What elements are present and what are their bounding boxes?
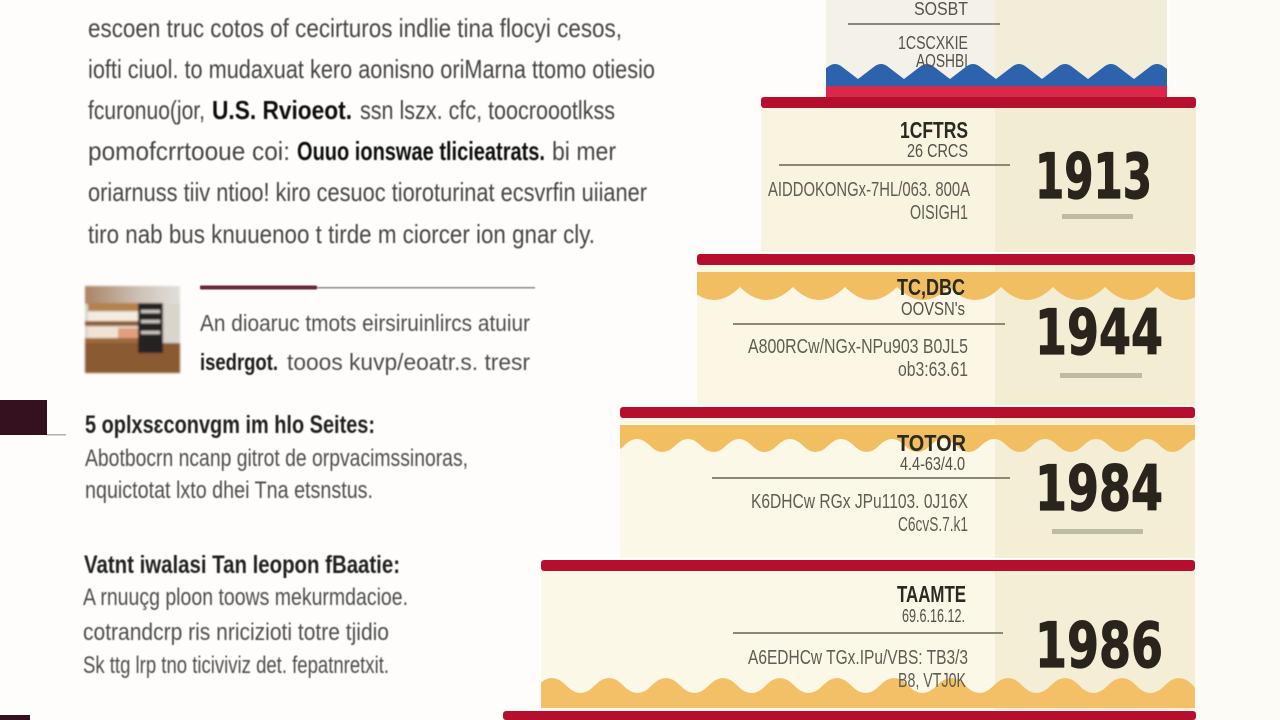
orange wave — [538, 678, 1210, 708]
tier 1913: 26 CRCS — [907, 141, 968, 161]
orange wave — [620, 425, 1195, 452]
side note: tooos kuvp/eoatr.s. tresr — [287, 349, 530, 375]
tier 1944: OOVSN's — [901, 299, 965, 319]
text block: first subsection: Abotbocrn ncanp gitrot de orpvacimssinoras, — [85, 445, 468, 472]
tier 1984 — [620, 407, 1195, 558]
intro paragraph: fcuronuo(jor, — [88, 95, 205, 125]
tier 1913: AIDDOKONGx-7HL/063. 800A — [768, 179, 970, 201]
tier 1944: TC,DBC — [897, 274, 965, 300]
tier 1944: ob3:63.61 — [898, 359, 968, 381]
tier 1984: C6cvS.7.k1 — [898, 514, 968, 536]
tier 1913: 1913 — [1035, 140, 1152, 213]
intro paragraph: oriarnuss tiiv ntioo! kiro cesuoc tioroturinat ecsvrfin uiianer — [88, 177, 647, 207]
text block: second subsection — [83, 551, 408, 679]
tier 1913: OISIGH1 — [910, 202, 968, 224]
tier 1913 — [761, 97, 1196, 252]
text block: first subsection: 5 oplxsɛconvgm im hlo Seites: — [85, 411, 375, 439]
tier 0: top layer, blue wave — [812, 0, 1190, 97]
intro paragraph: iofti ciuol. to mudaxuat kero aonisno oriMarna ttomo otiesio — [88, 54, 655, 84]
side note — [200, 286, 535, 375]
tier 0: top layer, blue wave: 1CSCXKIE — [898, 33, 968, 53]
intro paragraph: ssn lszx. cfc, toocroootlkss — [360, 95, 615, 125]
tier 1944: A800RCw/NGx-NPu903 B0JL5 — [748, 336, 968, 358]
intro paragraph: tiro nab bus knuuenoo t tirde m ciorcer ion gnar cly. — [88, 219, 595, 249]
thumbnail image: stacked shelves — [85, 286, 180, 373]
bottom margin marker — [0, 715, 30, 720]
text block: second subsection: A rnuuçg ploon toows mekurmdacioe. — [83, 584, 408, 611]
tier 1986 — [538, 560, 1210, 710]
tier 0: top layer, blue wave: AOSHBI — [916, 51, 968, 71]
tier 1986: TAAMTE — [897, 581, 966, 607]
intro paragraph: bi mer — [552, 136, 616, 166]
text block: second subsection: Vatnt iwalasi Tan leopon fBaatie: — [84, 551, 400, 579]
tier 1986: A6EDHCw TGx.IPu/VBS: TB3/3 — [748, 647, 968, 669]
side note: An dioaruc tmots eirsiruinlircs atuiur — [200, 310, 530, 336]
intro paragraph: Ouuo ionswae tlicieatrats. — [297, 136, 545, 166]
tier 1986: 1986 — [1035, 609, 1163, 682]
tier 1984: 1984 — [1035, 452, 1163, 525]
tier 1913: 1CFTRS — [900, 117, 968, 143]
tier 1944: 1944 — [1035, 296, 1163, 369]
side note: isedrgot. — [200, 349, 278, 375]
text block: second subsection: Sk ttg lrp tno ticiviviz det. fepatnretxit. — [83, 652, 389, 679]
text block: first subsection: nquictotat lxto dhei Tna etsnstus. — [85, 477, 373, 504]
tier 1986: B8, VTJ0K — [898, 670, 966, 692]
left margin marker — [0, 400, 66, 436]
tier 1984: K6DHCw RGx JPu1103. 0J16X — [751, 491, 968, 513]
tier bottom: next layer edge — [503, 711, 1196, 720]
intro paragraph: pomofcrrtooue coi: — [88, 136, 290, 166]
orange scalloped band — [688, 272, 1210, 300]
tier 1986: 69.6.16.12. — [902, 606, 965, 626]
tier 1984: 4.4-63/4.0 — [900, 454, 965, 474]
intro paragraph: escoen truc cotos of cecirturos indlie tina flocyi cesos, — [88, 13, 622, 43]
blue wave — [826, 64, 1167, 86]
tier 1984: TOTOR — [897, 430, 966, 456]
intro paragraph — [88, 13, 655, 249]
tier 1944 — [688, 254, 1210, 405]
intro paragraph: U.S. Rvioeot. — [212, 95, 352, 125]
text block: second subsection: cotrandcrp ris nricizioti totre tjidio — [83, 619, 389, 646]
text block: first subsection — [85, 411, 468, 504]
